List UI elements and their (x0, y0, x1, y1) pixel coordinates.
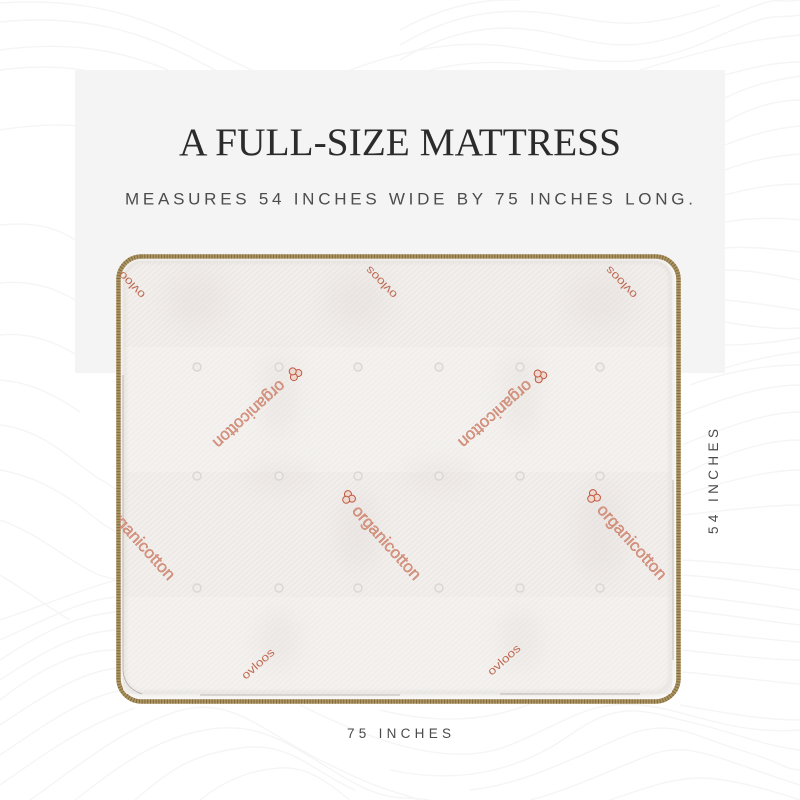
logo: organicotton lower right: organicotton (593, 501, 670, 584)
logo: organicotton upper left: organicotton (209, 376, 289, 452)
logo: organicotton lower centre: organicotton (348, 502, 425, 584)
small logo: top left: ovloos (111, 263, 148, 300)
small logo: top right: ovloos (603, 263, 640, 300)
logo: organicotton upper right: organicotton (454, 376, 536, 451)
inner edge shading (124, 261, 671, 693)
panel: title background (75, 70, 725, 373)
small logo: bottom right: ovloos (486, 642, 524, 678)
mattress top surface (102, 261, 673, 695)
logo: organicotton clipped left: organicotton (102, 502, 179, 584)
mattress (102, 256, 678, 702)
title: A FULL-SIZE MATTRESS (179, 120, 621, 164)
small logo: bottom left: ovloos (240, 646, 278, 682)
tuft buttons (193, 363, 604, 592)
mattress piped edge (118, 256, 678, 702)
length dimension label: 54 INCHES (706, 429, 721, 534)
subtitle: MEASURES 54 INCHES WIDE BY 75 INCHES LONG. (125, 190, 693, 208)
width dimension label: 75 INCHES (347, 726, 451, 741)
inner seam lines (123, 375, 673, 695)
small logo: top centre: ovloos (363, 263, 400, 300)
tufting shadows (185, 289, 612, 644)
